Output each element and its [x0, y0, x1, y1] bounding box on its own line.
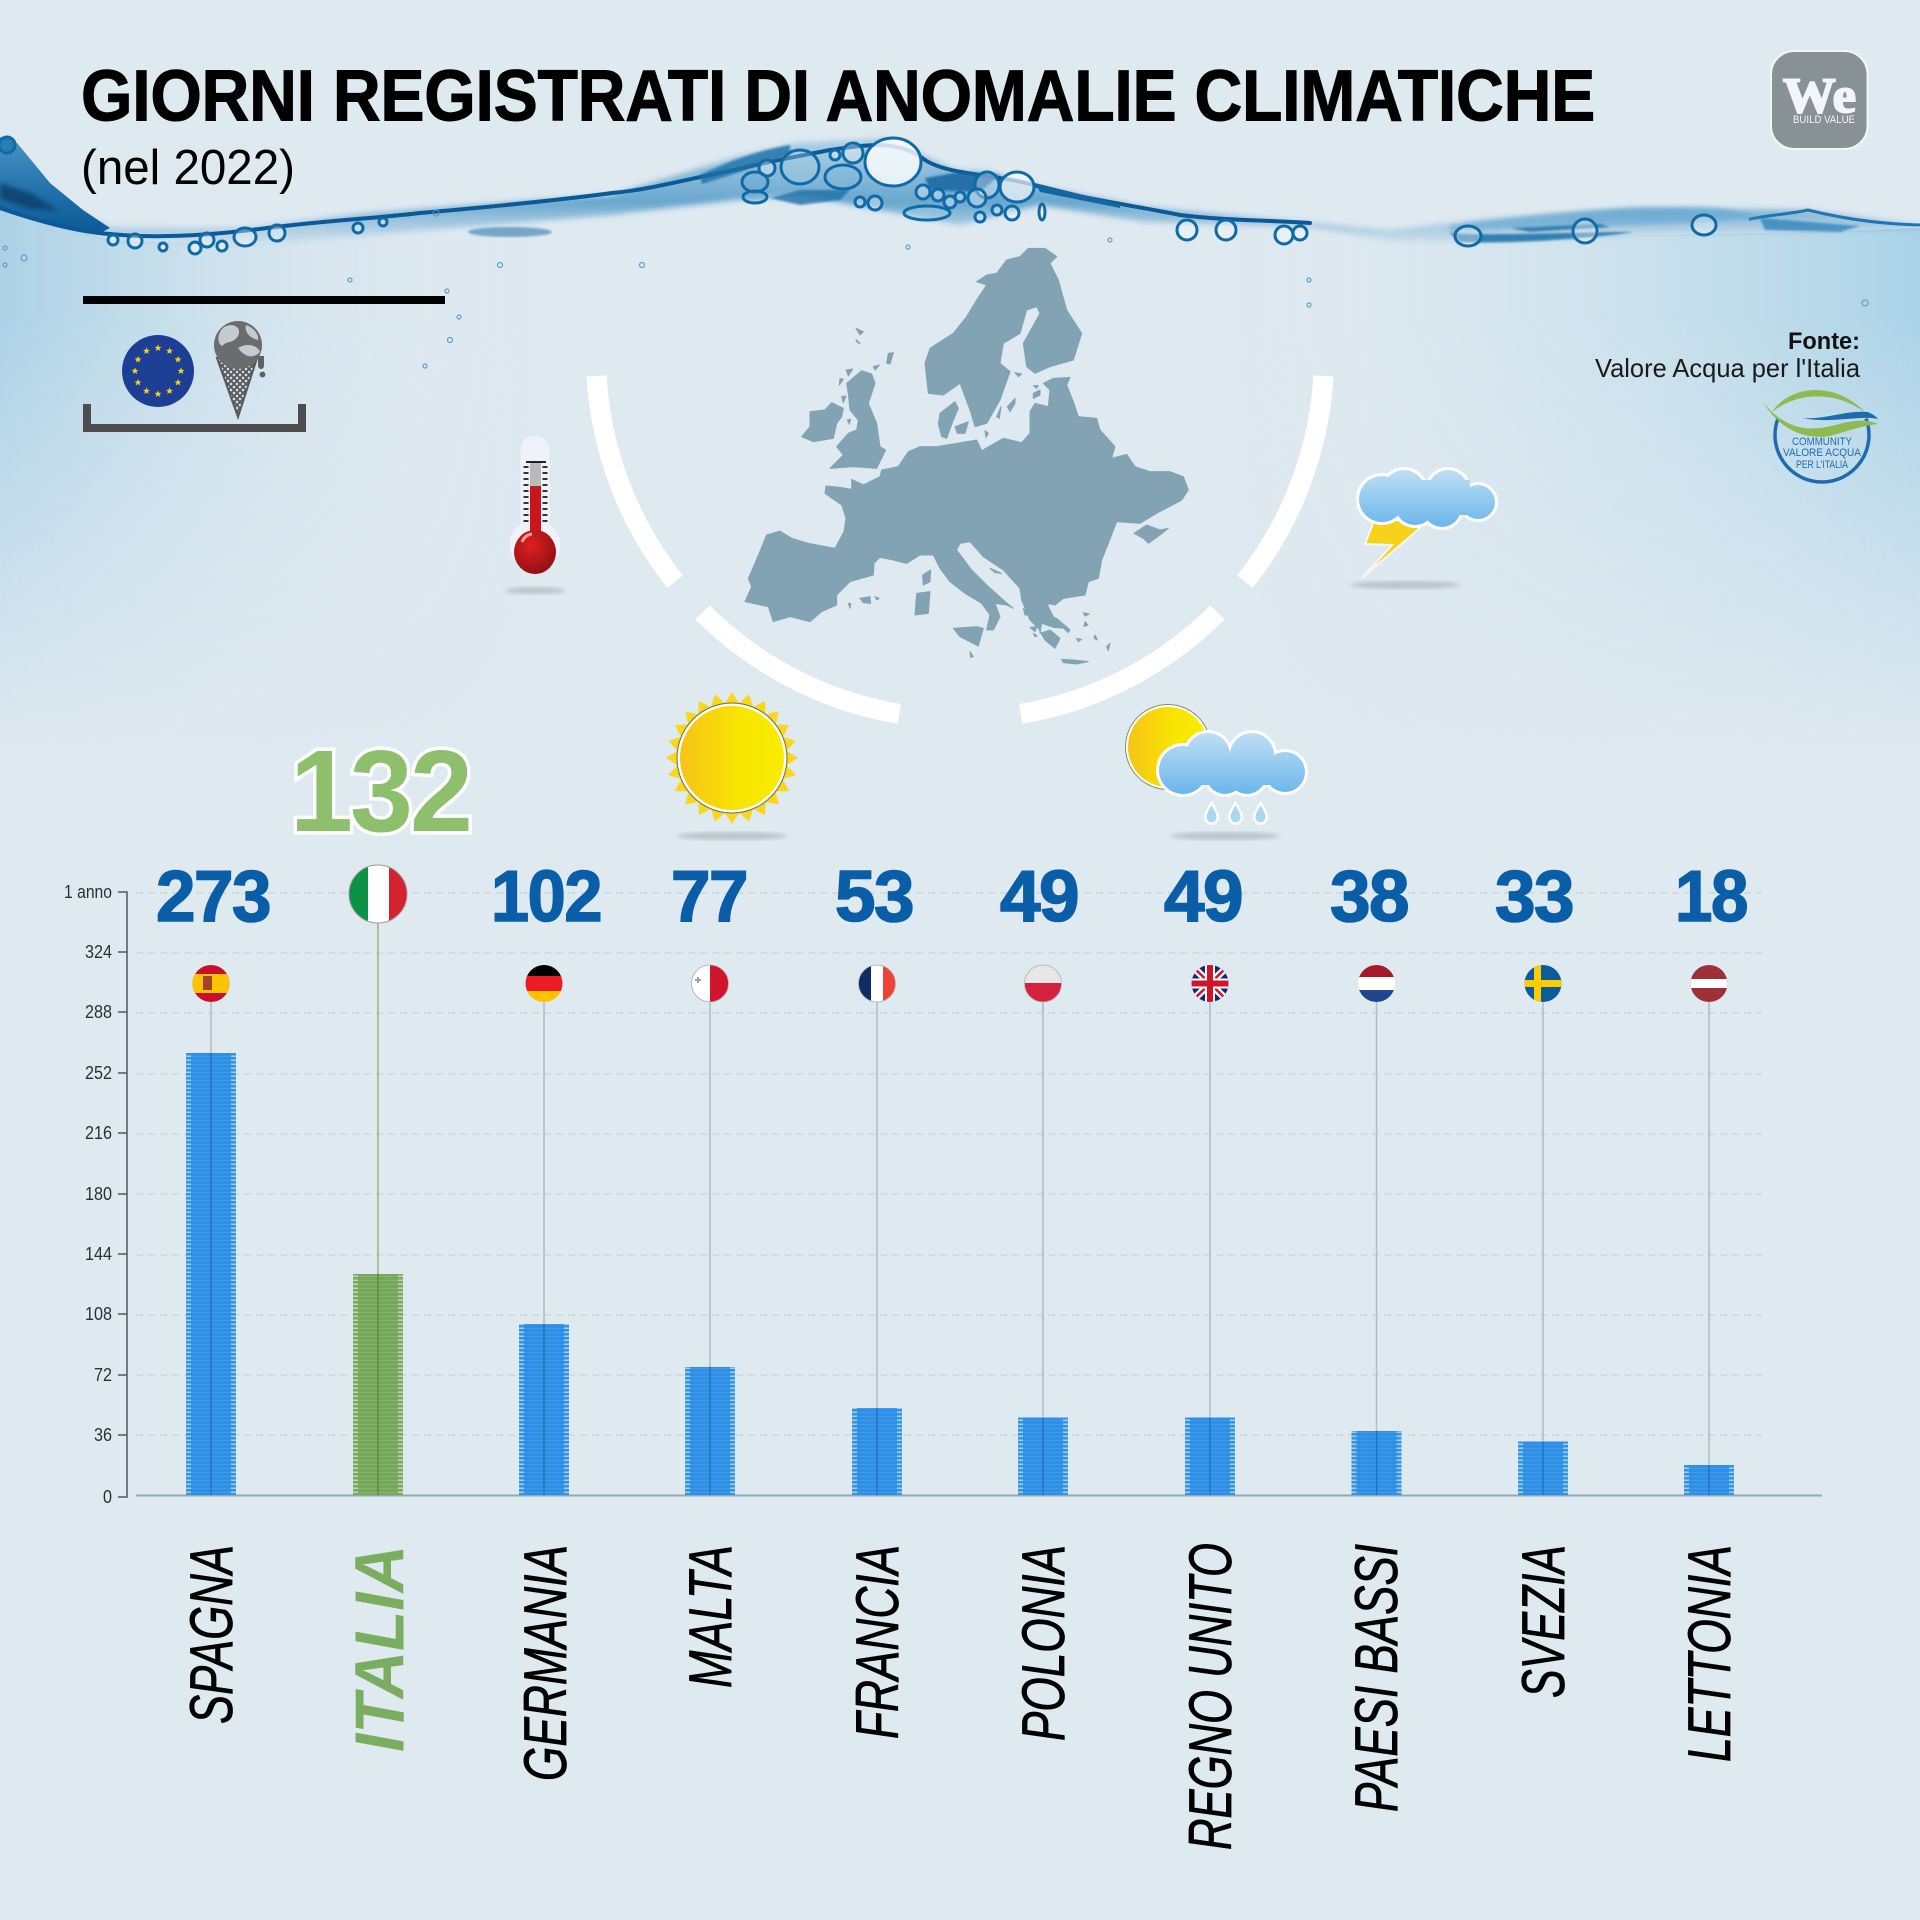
icon: thermometer: [505, 435, 565, 594]
y axis: 144: [85, 1244, 112, 1264]
y axis: 288: [85, 1002, 112, 1022]
column: Polonia: 49: [1000, 857, 1078, 937]
baseline: [136, 1494, 1822, 1496]
y axis: 252: [85, 1063, 112, 1083]
column: Paesi Bassi: [1330, 857, 1410, 1812]
map of Europe: [745, 248, 1188, 664]
column: Germania: 102: [491, 857, 601, 937]
column: Svezia: 33: [1495, 857, 1573, 937]
column: Spagna: 273: [156, 857, 270, 937]
y axis: 0: [103, 1487, 112, 1507]
logo: Community Valore Acqua: PER L'ITALIA: [1796, 459, 1849, 471]
water background: [0, 210, 1920, 686]
logo: We Build Value: We: [1783, 67, 1856, 123]
column: Regno Unito: REGNO UNITO: [1177, 1543, 1244, 1850]
icon: sun: [666, 692, 798, 840]
title: GIORNI REGISTRATI DI ANOMALIE CLIMATICHE: [81, 56, 1595, 136]
divider rule: [83, 296, 445, 304]
column: Italia: [290, 726, 470, 1752]
icon: lightning cloud: [1350, 467, 1498, 589]
column: Regno Unito: [1164, 857, 1244, 1850]
column: Francia: FRANCIA: [844, 1545, 911, 1739]
source credit: Valore Acqua per l'Italia: [1595, 353, 1861, 383]
legend icons: EU and melting globe: [87, 321, 302, 428]
column: Italia: 132: [290, 726, 470, 856]
bracket: [87, 404, 302, 428]
column: Francia: 53: [835, 857, 913, 937]
y axis: 216: [85, 1123, 112, 1143]
logo: We Build Value: [1771, 51, 1868, 149]
column: Spagna: [156, 857, 270, 1724]
column: Francia: [835, 857, 913, 1739]
logo: Community Valore Acqua: COMMUNITY: [1792, 436, 1853, 448]
y axis: 36: [94, 1425, 112, 1445]
y axis: 324: [85, 942, 112, 962]
logo: We Build Value: BUILD VALUE: [1793, 114, 1855, 126]
column: Germania: [491, 857, 601, 1781]
column: Malta: [671, 857, 747, 1688]
icon: EU flag: [122, 335, 194, 407]
column: Svezia: SVEZIA: [1510, 1545, 1577, 1698]
y axis: 1 anno: [64, 882, 112, 902]
column: Italia: ITALIA: [340, 1545, 418, 1752]
grid lines: [136, 893, 1762, 1435]
column: Spagna: SPAGNA: [178, 1545, 245, 1724]
column: Polonia: [1000, 857, 1078, 1741]
small bubbles: [3, 210, 1868, 368]
y axis: 180: [85, 1184, 112, 1204]
y axis: 72: [94, 1365, 112, 1385]
column: Svezia: [1495, 857, 1577, 1698]
source credit: [1595, 328, 1861, 383]
column: Lettonia: [1675, 857, 1747, 1762]
column: Paesi Bassi: PAESI BASSI: [1343, 1544, 1410, 1812]
subtitle: (nel 2022): [81, 141, 295, 195]
source credit: Fonte:: [1788, 328, 1860, 355]
column: Germania: GERMANIA: [512, 1545, 579, 1781]
logo: Community Valore Acqua: VALORE ACQUA: [1783, 447, 1862, 459]
air bubbles: [0, 137, 1716, 254]
bar chart: [64, 726, 1822, 1850]
column: Malta: 77: [671, 857, 747, 937]
column: Polonia: POLONIA: [1010, 1545, 1077, 1741]
column: Regno Unito: 49: [1164, 857, 1242, 937]
column: Lettonia: 18: [1675, 857, 1747, 937]
water surface wave: [0, 137, 1920, 245]
y axis: 108: [85, 1304, 112, 1324]
white ring around the map: [597, 376, 1323, 714]
column: Paesi Bassi: 38: [1330, 857, 1408, 937]
icon: sun behind rain cloud: [1126, 704, 1308, 840]
y axis: [64, 882, 127, 1507]
logo: Community Valore Acqua: [1763, 390, 1878, 482]
column: Lettonia: LETTONIA: [1676, 1545, 1743, 1762]
icon: melting globe ice cream: [214, 321, 265, 417]
column: Malta: MALTA: [677, 1545, 744, 1688]
